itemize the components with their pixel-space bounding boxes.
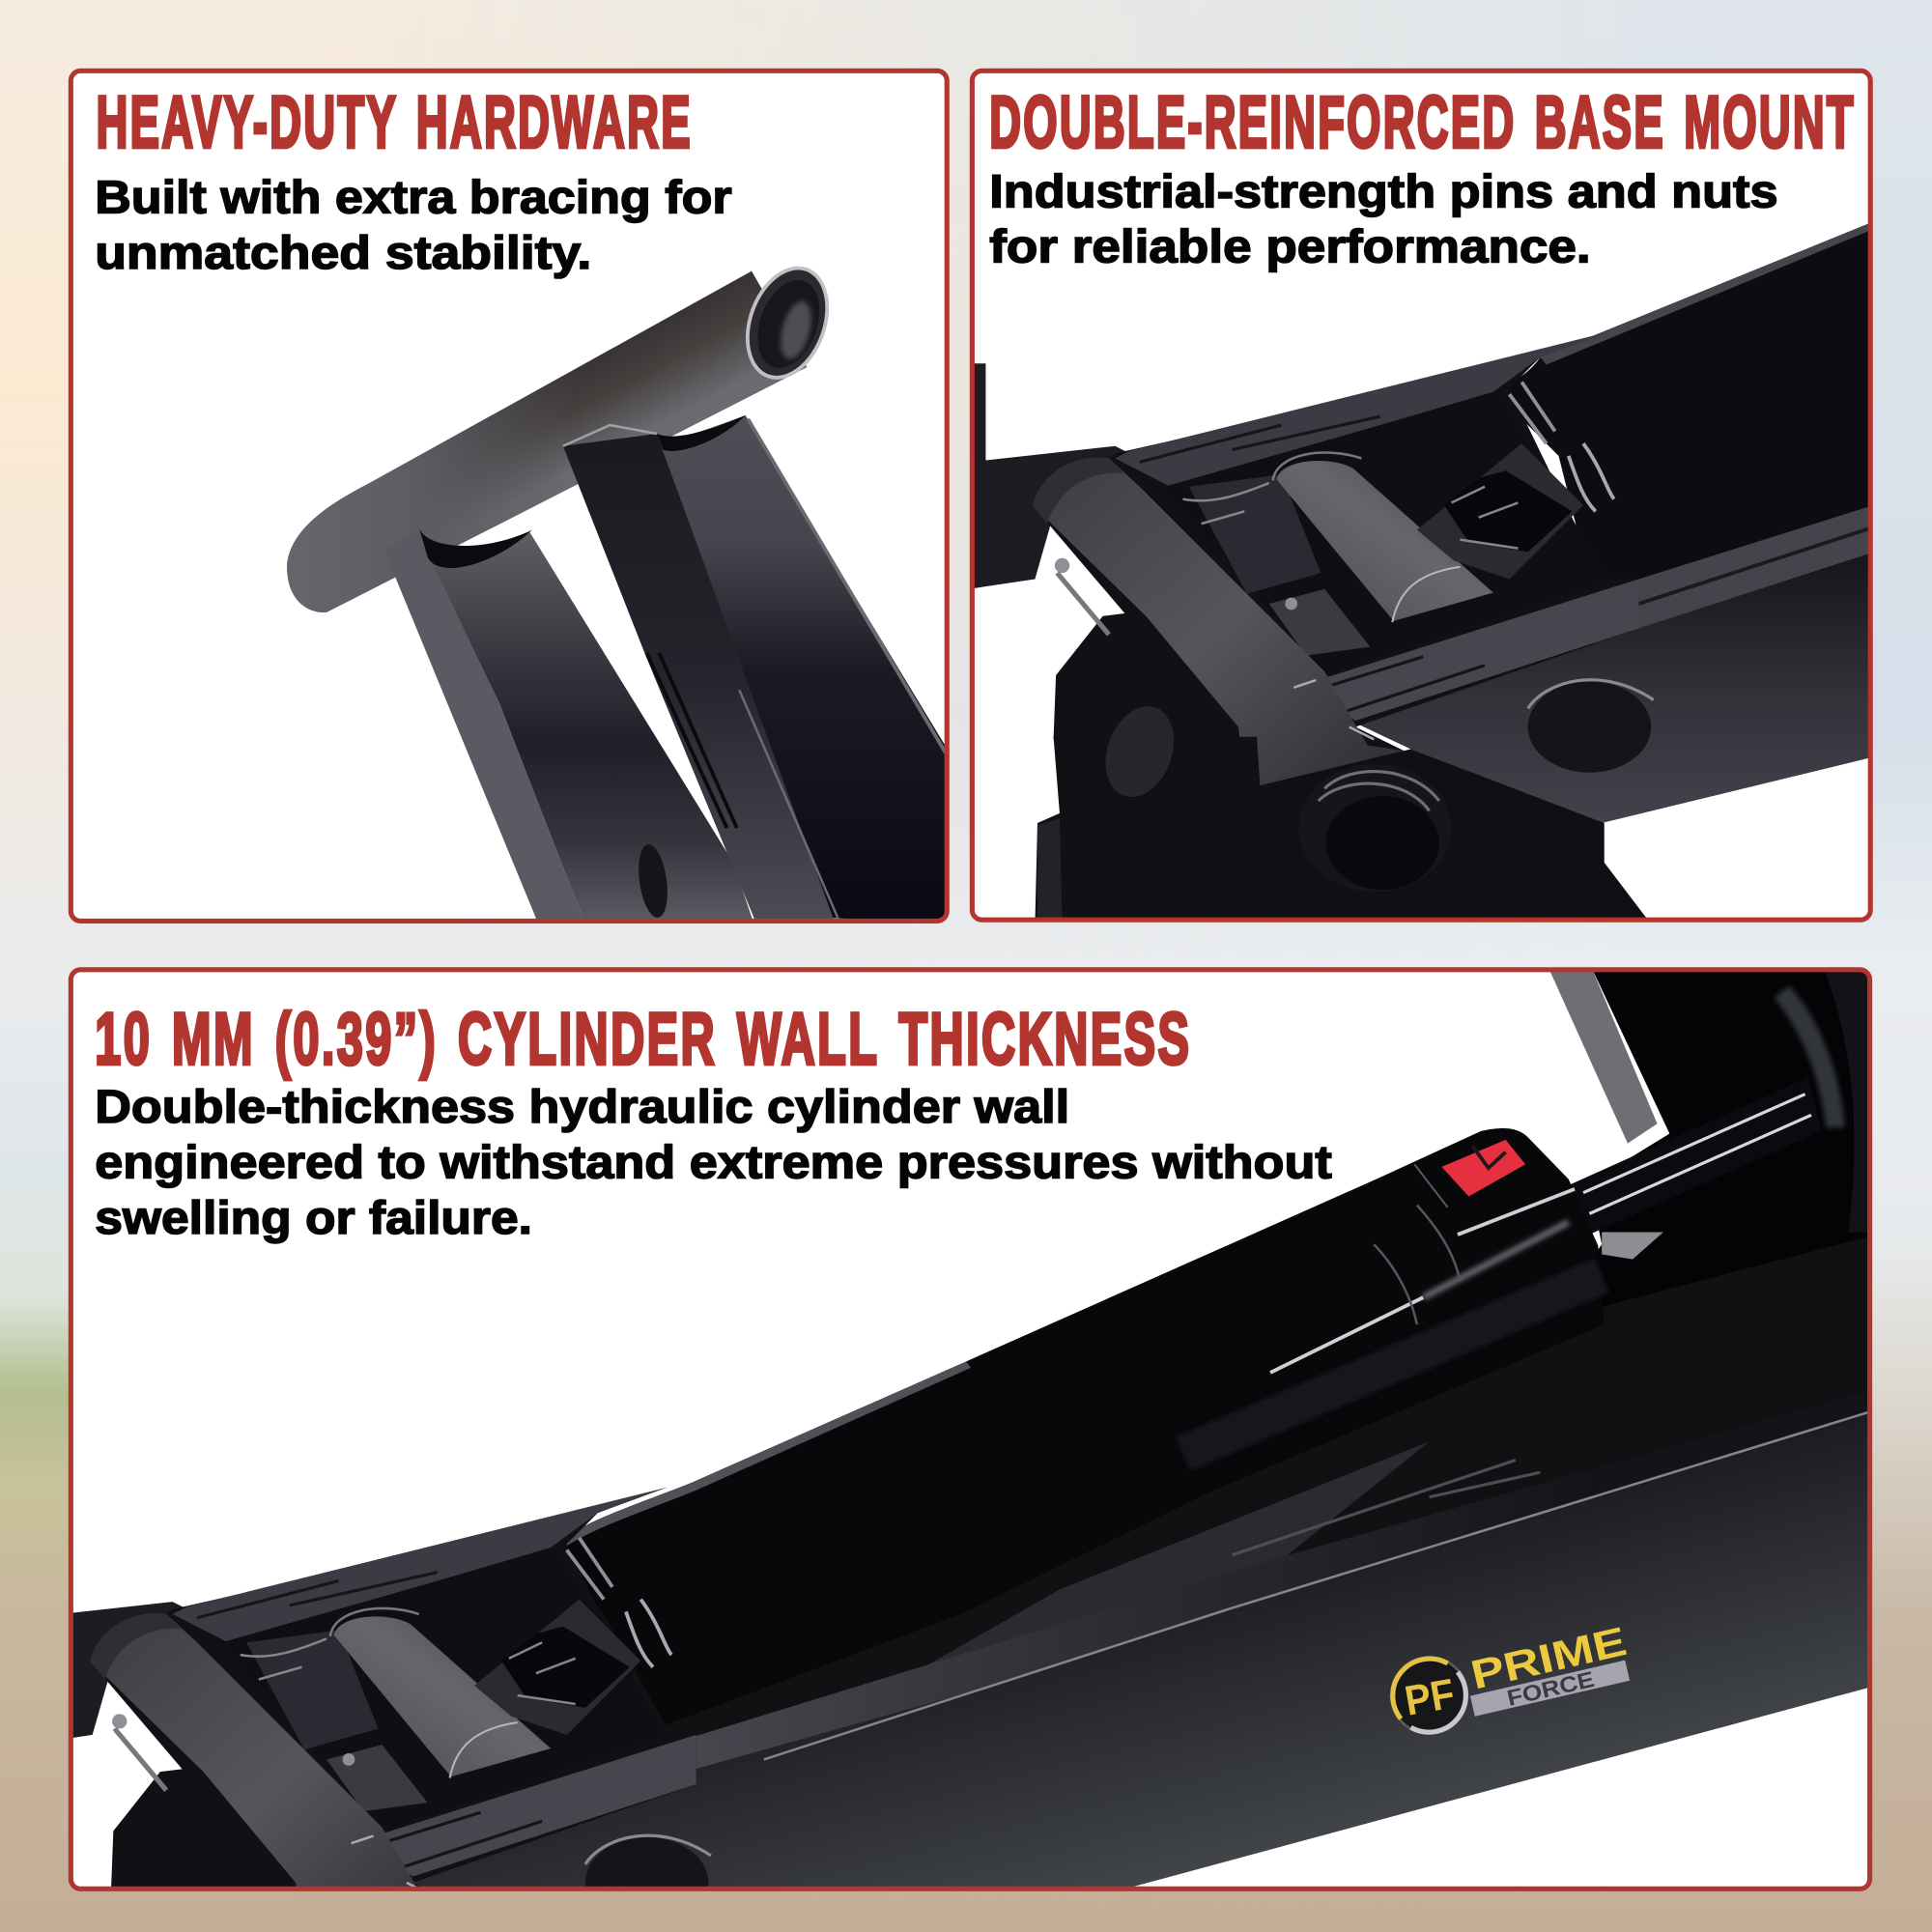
logo: Prime Force: FORCE — [1505, 1666, 1597, 1711]
heading: 10 MM (0.39”) CYLINDER WALL THICKNESS — [95, 998, 1191, 1080]
logo: Prime Force — [1391, 1618, 1631, 1734]
logo: Prime Force: PRIME — [1466, 1618, 1631, 1697]
body text: for reliable performance. — [989, 221, 1591, 273]
image: base mount with cylinder — [936, 216, 1886, 924]
icon: red cylinder logo — [1441, 1140, 1525, 1197]
image: bracket tube and legs — [287, 257, 947, 924]
lower gusset and front pin — [1035, 696, 1651, 924]
panel: double-reinforced base mount — [936, 71, 1886, 924]
body text: engineered to withstand extreme pressures without — [95, 1136, 1332, 1188]
heading: HEAVY-DUTY HARDWARE — [96, 81, 693, 163]
body text: swelling or failure. — [95, 1192, 532, 1244]
body text: unmatched stability. — [95, 227, 591, 279]
body text: Industrial-strength pins and nuts — [989, 165, 1778, 217]
panel border — [71, 970, 1870, 1889]
panel border — [972, 71, 1870, 920]
panel: heavy-duty hardware — [71, 71, 947, 924]
body text: Double-thickness hydraulic cylinder wall — [95, 1081, 1069, 1133]
body text: Built with extra bracing for — [95, 172, 732, 224]
image: hydraulic cylinder on arm — [0, 969, 1886, 1932]
logo: Prime Force: PF — [1402, 1671, 1458, 1725]
panel: cylinder wall thickness — [0, 969, 1886, 1932]
panel border — [71, 71, 947, 921]
